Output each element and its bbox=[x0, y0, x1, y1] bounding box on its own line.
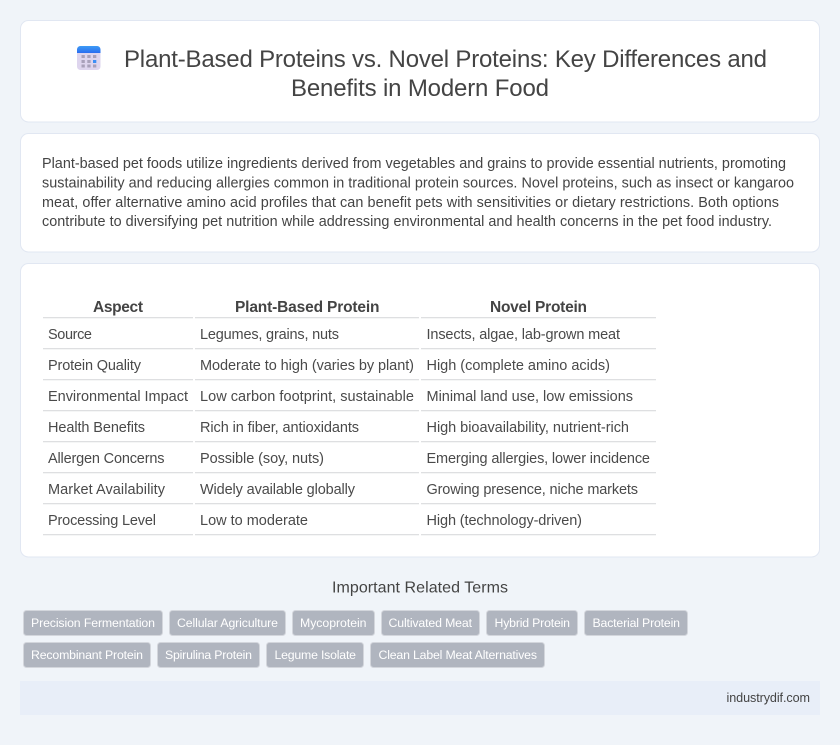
table row: health benefits: High bioavailability, nutrient-rich bbox=[426, 420, 629, 436]
tag: cultivated meat bbox=[382, 610, 480, 636]
tag: recombinant protein bbox=[24, 642, 150, 668]
intro paragraph text bbox=[42, 156, 794, 230]
tag: mycoprotein: Mycoprotein bbox=[300, 616, 367, 630]
tag: precision fermentation bbox=[24, 610, 162, 636]
tag: legume isolate bbox=[266, 642, 364, 668]
table row: protein quality: Protein Quality bbox=[48, 358, 142, 374]
tag: spirulina protein bbox=[158, 642, 260, 668]
table row: market availability bbox=[43, 482, 656, 504]
tag: bacterial protein: Bacterial Protein bbox=[592, 616, 680, 630]
table row: allergen concerns: Allergen Concerns bbox=[48, 451, 164, 467]
intro paragraph text: meat, offer alternative amino acid profiles that can benefit pets with sensitivities or dietary restrictions. Both options bbox=[42, 195, 779, 211]
table header row: Novel Protein bbox=[490, 299, 587, 316]
table row: market availability: Market Availability bbox=[48, 482, 166, 498]
table header row bbox=[43, 299, 656, 318]
table row: environmental impact: Low carbon footprint, sustainable bbox=[200, 389, 414, 405]
panel: title card bbox=[20, 20, 820, 122]
table row: source: Source bbox=[48, 327, 92, 343]
tag: cultivated meat: Cultivated Meat bbox=[388, 616, 473, 630]
table row: protein quality: High (complete amino acids) bbox=[426, 358, 610, 374]
title text bbox=[124, 46, 767, 102]
tag: legume isolate: Legume Isolate bbox=[274, 648, 356, 662]
footer source text: industrydif.com bbox=[726, 691, 810, 705]
table row: protein quality: Moderate to high (varies by plant) bbox=[200, 358, 414, 374]
tag: spirulina protein: Spirulina Protein bbox=[165, 648, 252, 662]
icon: calendar bbox=[77, 46, 100, 70]
table row: allergen concerns: Emerging allergies, lower incidence bbox=[426, 451, 650, 467]
intro paragraph text: contribute to diversifying pet nutrition while addressing environmental and health concerns in the pet food industry. bbox=[42, 214, 772, 230]
table row: environmental impact: Environmental Impact bbox=[48, 389, 188, 405]
table row: processing level: Processing Level bbox=[48, 513, 156, 529]
table row: health benefits: Health Benefits bbox=[48, 420, 145, 436]
table row: protein quality bbox=[43, 358, 656, 380]
table row: processing level: High (technology-driven) bbox=[426, 513, 582, 529]
table row: allergen concerns bbox=[43, 451, 656, 473]
title text: Benefits in Modern Food bbox=[291, 75, 549, 102]
tag: bacterial protein bbox=[584, 610, 688, 636]
table header row: Aspect bbox=[93, 299, 143, 316]
title text: Plant-Based Proteins vs. Novel Proteins: Key Differences and bbox=[124, 46, 767, 73]
tag: clean label meat alternatives: Clean Label Meat Alternatives bbox=[378, 648, 537, 662]
table row: environmental impact: Minimal land use, low emissions bbox=[426, 389, 633, 405]
heading: important related terms: Important Related Terms bbox=[332, 580, 508, 597]
tag: cellular agriculture: Cellular Agriculture bbox=[177, 616, 278, 630]
table row: allergen concerns: Possible (soy, nuts) bbox=[200, 451, 324, 467]
panel: related term tags bbox=[24, 610, 688, 668]
tag: precision fermentation: Precision Fermentation bbox=[31, 616, 155, 630]
tag: cellular agriculture bbox=[170, 610, 286, 636]
tag: mycoprotein bbox=[292, 610, 374, 636]
tag: hybrid protein: Hybrid Protein bbox=[494, 616, 570, 630]
table row: market availability: Growing presence, niche markets bbox=[426, 482, 638, 498]
panel: intro paragraph card bbox=[20, 134, 820, 252]
footer bar bbox=[20, 681, 820, 715]
table row: market availability: Widely available globally bbox=[200, 482, 356, 498]
table row: source bbox=[43, 327, 656, 349]
table row: source: Insects, algae, lab-grown meat bbox=[426, 327, 620, 343]
tag: hybrid protein bbox=[486, 610, 578, 636]
table row: environmental impact bbox=[43, 389, 656, 411]
panel: comparison table card bbox=[20, 264, 820, 557]
table row: health benefits bbox=[43, 420, 656, 442]
table header row: Plant-Based Protein bbox=[235, 299, 380, 316]
table row: processing level: Low to moderate bbox=[200, 513, 308, 529]
tag: clean label meat alternatives bbox=[370, 642, 544, 668]
table row: source: Legumes, grains, nuts bbox=[200, 327, 339, 343]
tag: recombinant protein: Recombinant Protein bbox=[31, 648, 143, 662]
table row: health benefits: Rich in fiber, antioxidants bbox=[200, 420, 359, 436]
intro paragraph text: sustainability and reducing allergies common in traditional protein sources. Novel proteins, such as insect or kangaroo bbox=[42, 175, 794, 191]
intro paragraph text: Plant-based pet foods utilize ingredients derived from vegetables and grains to provide essential nutrients, promoting bbox=[42, 156, 786, 172]
table row: processing level bbox=[43, 513, 656, 535]
